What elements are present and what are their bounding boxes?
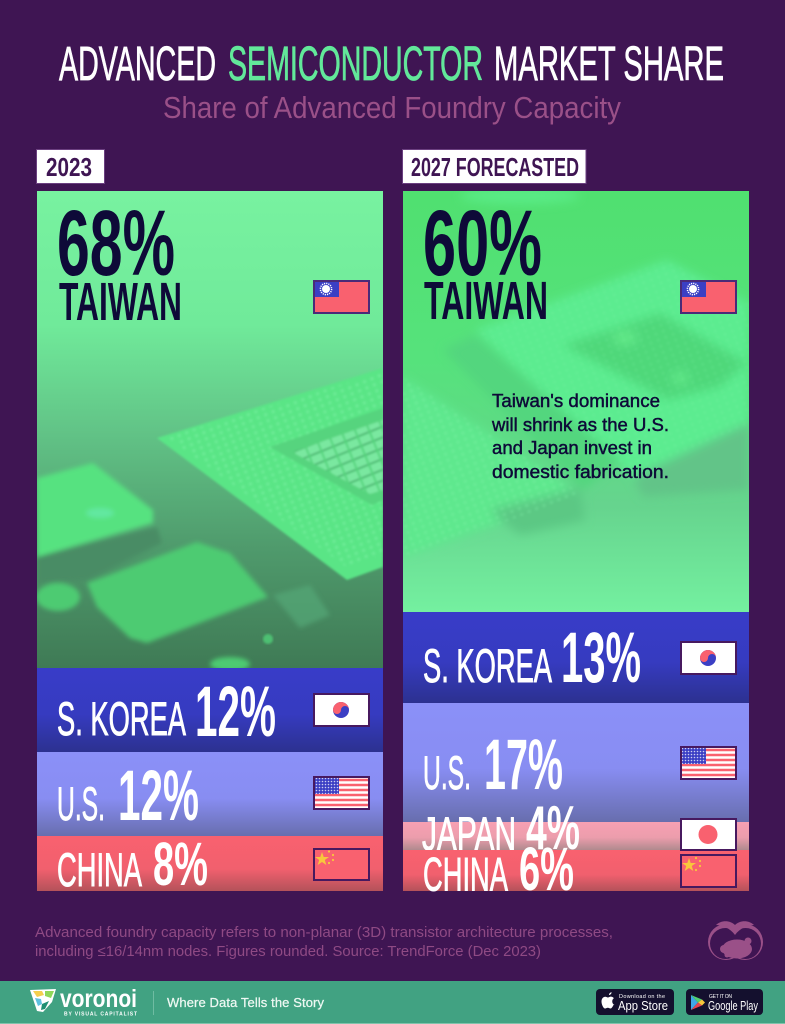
flag: China (314, 849, 369, 880)
year label: 2027 forecasted: 2027 FORECASTED (411, 152, 579, 182)
year label: 2023: 2023 (46, 152, 92, 182)
icon: voronoi logo (30, 989, 56, 1012)
panel: 2027 forecasted (402, 150, 749, 903)
annotation: Taiwan's dominance (491, 391, 669, 482)
flag: Taiwan (314, 281, 369, 313)
icon: mascot logo (708, 921, 763, 960)
flag: China (681, 855, 736, 887)
footer band (0, 981, 785, 1024)
China 2027 segment: 6% (519, 835, 574, 903)
China 2023 segment (37, 830, 383, 898)
Taiwan 2023 label: 68% (57, 191, 175, 295)
annotation: Taiwan's dominance: and Japan invest in (492, 438, 652, 458)
badge: Google Play (686, 989, 763, 1015)
Taiwan 2023 label: TAIWAN (59, 272, 182, 332)
badge: Google Play: GET IT ON (709, 994, 732, 1000)
South Korea 2023 segment: 12% (195, 673, 276, 752)
Taiwan 2027 label: 60% (423, 191, 542, 295)
year label: 2027 forecasted (402, 150, 586, 184)
Taiwan 2023 segment with chip photo (36, 191, 383, 671)
flag: Taiwan (681, 281, 736, 313)
flag: South Korea (681, 642, 736, 674)
South Korea 2027 segment: S. KOREA (423, 639, 552, 692)
annotation: Taiwan's dominance: Taiwan's dominance (492, 391, 660, 411)
title (59, 38, 724, 91)
Taiwan 2027 label (423, 191, 548, 331)
South Korea 2023 segment (37, 668, 383, 752)
badge: App Store: Download on the (619, 994, 665, 1000)
China 2027 segment (403, 835, 749, 903)
Japan 2027 segment: 4% (526, 794, 580, 863)
badge: App Store: App Store (618, 999, 668, 1013)
footnote: including ≤16/14nm nodes. Figures rounded. Source: TrendForce (Dec 2023) (35, 944, 541, 960)
Japan 2027 segment: JAPAN (422, 807, 516, 860)
flag: United States (681, 747, 736, 779)
Taiwan 2023 label (57, 191, 182, 332)
annotation: Taiwan's dominance: will shrink as the U.S. (491, 415, 669, 435)
tagline: Where Data Tells the Story (167, 995, 324, 1010)
badge: Google Play: Google Play (708, 999, 759, 1013)
annotation: Taiwan's dominance: domestic fabrication. (492, 462, 669, 482)
badge: App Store (596, 989, 674, 1015)
United States 2027 segment (403, 703, 749, 822)
title: ADVANCED (59, 38, 216, 91)
subtitle: Share of Advanced Foundry Capacity (163, 90, 621, 125)
title: SEMICONDUCTOR (228, 38, 483, 91)
Taiwan 2027 label: TAIWAN (424, 271, 548, 331)
Taiwan 2027 segment with chip photo (403, 188, 749, 612)
South Korea 2027 segment: 13% (561, 619, 641, 698)
South Korea 2027 segment (403, 612, 749, 703)
United States 2027 segment: 17% (484, 726, 563, 805)
footnote (35, 925, 613, 960)
United States 2023 segment: U.S. (57, 777, 105, 830)
South Korea 2023 segment: S. KOREA (57, 692, 186, 745)
voronoi wordmark: voronoi (60, 985, 137, 1013)
China 2027 segment: CHINA (423, 848, 508, 900)
footnote: Advanced foundry capacity refers to non-planar (3D) transistor architecture processes, (35, 925, 613, 941)
Japan 2027 segment (403, 794, 749, 863)
United States 2023 segment (37, 752, 383, 836)
China 2023 segment: 8% (153, 830, 208, 898)
China 2023 segment: CHINA (57, 843, 142, 896)
by visual capitalist: BY VISUAL CAPITALIST (64, 1012, 137, 1018)
flag: South Korea (314, 694, 369, 726)
United States 2027 segment: U.S. (423, 746, 471, 799)
flag: Japan (681, 819, 736, 850)
United States 2023 segment: 12% (118, 757, 199, 836)
panel: 2023 (36, 150, 383, 898)
flag: United States (314, 777, 369, 809)
